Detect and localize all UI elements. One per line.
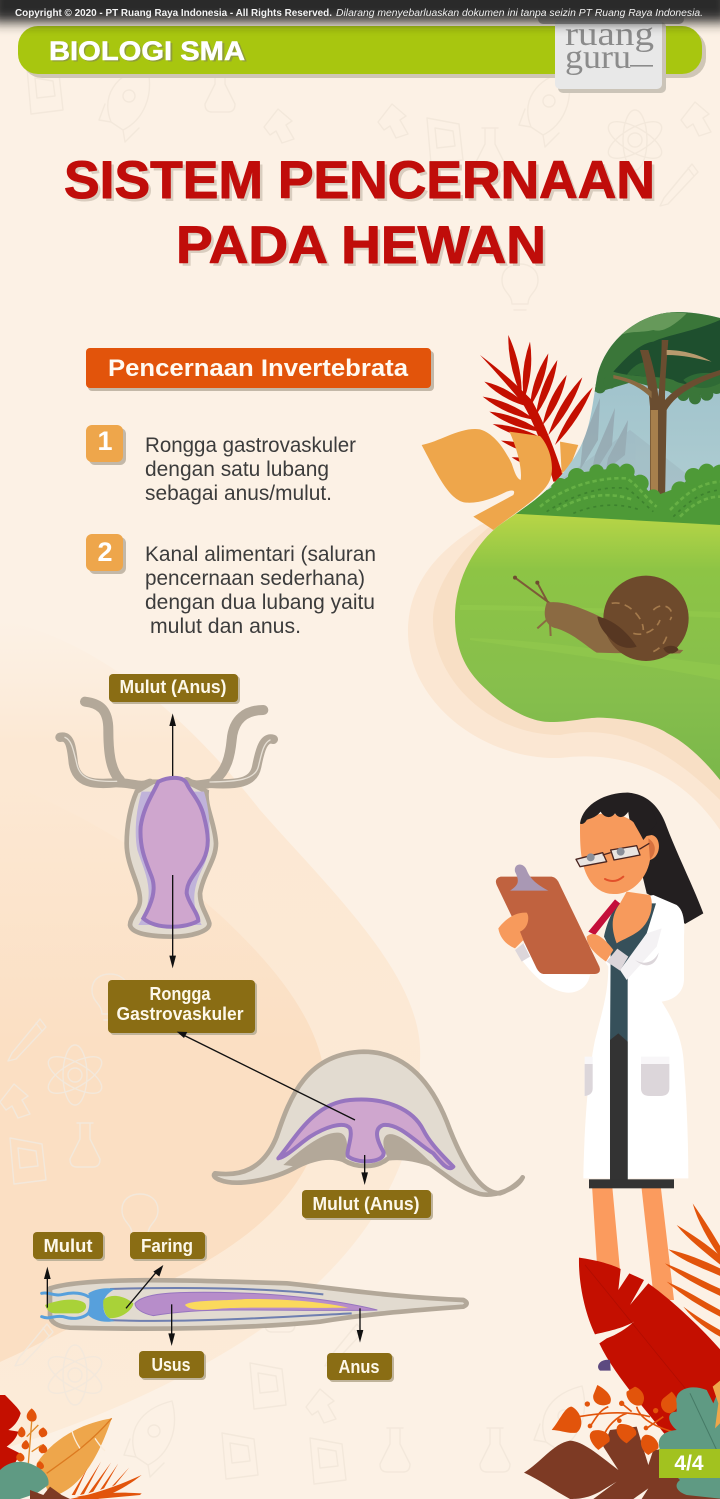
orange palm frond [665, 1203, 720, 1338]
label: Usus: Usus [152, 1355, 190, 1375]
list item 1: sebagai anus/mulut. [145, 482, 332, 505]
label: Usus [139, 1351, 206, 1380]
glasses [576, 843, 649, 867]
list item 2 [86, 534, 376, 638]
label: Mulut: Mulut [44, 1236, 93, 1256]
neckline and top [604, 903, 656, 1180]
label: Rongga Gastrovaskuler: Rongga [150, 984, 211, 1004]
header bar: Biologi SMA: BIOLOGI SMA [50, 38, 248, 68]
logo: ruangguru [555, 16, 666, 93]
jellyfish bell [214, 1052, 523, 1195]
worm green parts [45, 1296, 133, 1318]
arrow to Usus [170, 1304, 174, 1335]
label: Faring: Faring [141, 1236, 193, 1256]
background: darker peach wave [0, 780, 325, 1362]
skirt [610, 1033, 628, 1180]
section heading: Pencernaan Invertebrata [86, 348, 434, 391]
list item 2: dengan dua lubang yaitu [145, 591, 375, 614]
list item 1: Rongga gastrovaskuler [145, 434, 356, 457]
bushes [513, 463, 720, 527]
hair back [627, 793, 703, 924]
diagram 2: jellyfish [177, 1032, 523, 1195]
collar [620, 928, 662, 980]
list item 2: pencernaan sederhana) [145, 567, 365, 590]
sleeve and arm [515, 943, 590, 993]
grass stripes [460, 605, 720, 680]
label: Rongga Gastrovaskuler: Gastrovaskuler [116, 1004, 244, 1024]
label: Mulut (Anus) top: Mulut (Anus) [120, 677, 227, 697]
orange palm [70, 1462, 142, 1499]
page counter 4/4: 4/4 [674, 1452, 704, 1475]
list item 2: 2 [97, 537, 113, 567]
orange leaf [422, 429, 578, 530]
doctor character [496, 793, 703, 1300]
coat [583, 895, 688, 1178]
title: PADA HEWAN [176, 216, 546, 275]
worm nerve lines [107, 1288, 352, 1321]
header bar: Biologi SMA: BIOLOGI SMA [49, 36, 245, 66]
diagram 3: flatworm [42, 1265, 467, 1346]
arrow to Rongga Gastrovaskuler [183, 1035, 355, 1120]
snail [513, 576, 689, 661]
mountains [562, 398, 686, 492]
hydra tentacles [60, 702, 273, 785]
pen [588, 899, 620, 935]
label: Anus: Anus [338, 1357, 380, 1377]
page counter 4/4 [659, 1449, 720, 1478]
red palm frond [480, 335, 593, 482]
arrow up [171, 725, 175, 776]
list item 2: Kanal alimentari (saluran [145, 543, 376, 566]
label: Anus [327, 1353, 394, 1382]
arrow to Faring [126, 1272, 157, 1308]
orange leaf [37, 1418, 112, 1497]
background: light peach wave [0, 620, 420, 1450]
brown monstera leaf [524, 1427, 720, 1499]
diagram 1: hydra [60, 702, 273, 968]
face [580, 814, 659, 894]
list item 1: dengan satu lubang [145, 458, 329, 481]
red leaf [579, 1258, 720, 1437]
list item 2: mulut dan anus. [150, 615, 301, 638]
title: SISTEM PENCERNAAN [64, 151, 655, 210]
tree [590, 310, 720, 502]
red leaf [0, 1395, 21, 1487]
top copyright bar [0, 0, 720, 24]
top copyright bar: Dilarang menyebarluaskan dokumen ini tanpa seizin PT Ruang Raya Indonesia. [336, 8, 703, 19]
landscape blob: forest scene with snail [455, 312, 720, 780]
list item 1 [86, 425, 356, 505]
top copyright bar: Copyright © 2020 - PT Ruang Raya Indonesia - All Rights Reserved. [15, 8, 332, 19]
clipboard clip [510, 865, 548, 891]
arrow down [171, 875, 175, 957]
pockets [641, 1057, 669, 1096]
arrow to Mulut [45, 1277, 49, 1308]
hydra body [127, 782, 216, 937]
arrow down [363, 1155, 367, 1173]
bottom left foliage [0, 1395, 142, 1499]
smile [605, 877, 623, 881]
worm purple intestine [135, 1292, 377, 1316]
label: Mulut (Anus) jellyfish [302, 1190, 433, 1220]
teal leaf [659, 1387, 720, 1499]
worm blue pharynx [42, 1288, 115, 1322]
label: Faring [130, 1232, 207, 1261]
bottom right foliage [524, 1203, 720, 1499]
teal leaf [0, 1462, 49, 1499]
hand right [587, 934, 613, 962]
tree canopy [590, 310, 720, 404]
title: SISTEM PENCERNAAN [67, 154, 658, 213]
worm yellow core [185, 1299, 348, 1310]
small orange leaves [552, 1385, 687, 1455]
arrow to Anus [358, 1308, 362, 1332]
label: Mulut (Anus) top [109, 674, 240, 704]
title: PADA HEWAN [179, 219, 549, 278]
chest skin [613, 892, 652, 943]
brown leaf [30, 1487, 70, 1499]
header bar: Biologi SMA [18, 26, 706, 78]
legs [592, 1180, 674, 1300]
fringe [580, 793, 657, 840]
section heading: Pencernaan Invertebrata: Pencernaan Invertebrata [108, 355, 408, 382]
logo: ruangguru: guru [565, 39, 631, 76]
purple shoe [598, 1360, 611, 1371]
hydra gastrovascular cavity [140, 778, 208, 927]
label: Mulut [33, 1232, 105, 1261]
label: Mulut (Anus) jellyfish: Mulut (Anus) [312, 1194, 420, 1214]
tree trunk [640, 340, 720, 502]
title [64, 151, 658, 278]
worm body [50, 1280, 467, 1329]
hand left [498, 913, 528, 948]
orange accent leaf [713, 1381, 720, 1428]
orange berries branch [16, 1408, 47, 1469]
list item 1: 1 [97, 426, 113, 456]
label: Rongga Gastrovaskuler [108, 980, 257, 1035]
peach bands behind landscape [408, 500, 720, 830]
clipboard [496, 877, 600, 974]
logo: ruangguru: ruang [565, 16, 654, 53]
grass [455, 514, 720, 780]
jellyfish cavity [278, 1099, 453, 1168]
